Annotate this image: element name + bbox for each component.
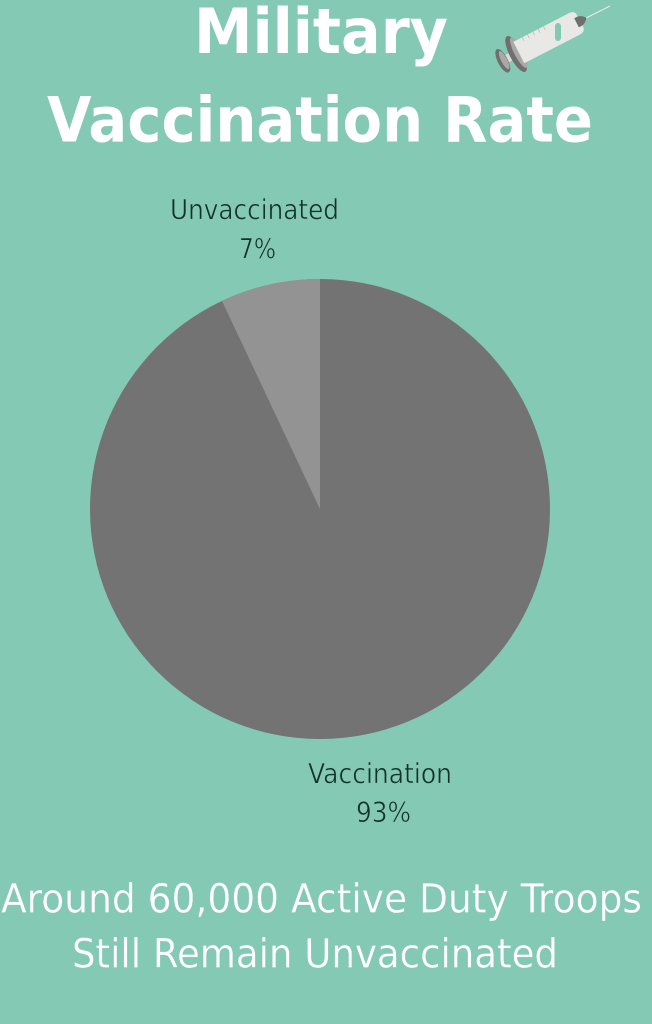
label: vaccination: Vaccination: [308, 758, 452, 790]
label: vaccination: [308, 758, 452, 828]
label: unvaccinated: Unvaccinated: [170, 194, 339, 226]
icon: syringe: [489, 0, 610, 81]
slice: unvaccinated 7%: [222, 279, 320, 509]
slice: vaccination 93%: [90, 279, 550, 739]
caption: Still Remain Unvaccinated: [72, 932, 558, 978]
label: unvaccinated: [170, 194, 339, 265]
pie chart: [90, 279, 550, 739]
label: unvaccinated: 7%: [239, 233, 276, 265]
caption: [1, 876, 642, 978]
label: vaccination: 93%: [356, 796, 411, 828]
title: Vaccination Rate: [47, 84, 593, 156]
title: [47, 0, 593, 156]
